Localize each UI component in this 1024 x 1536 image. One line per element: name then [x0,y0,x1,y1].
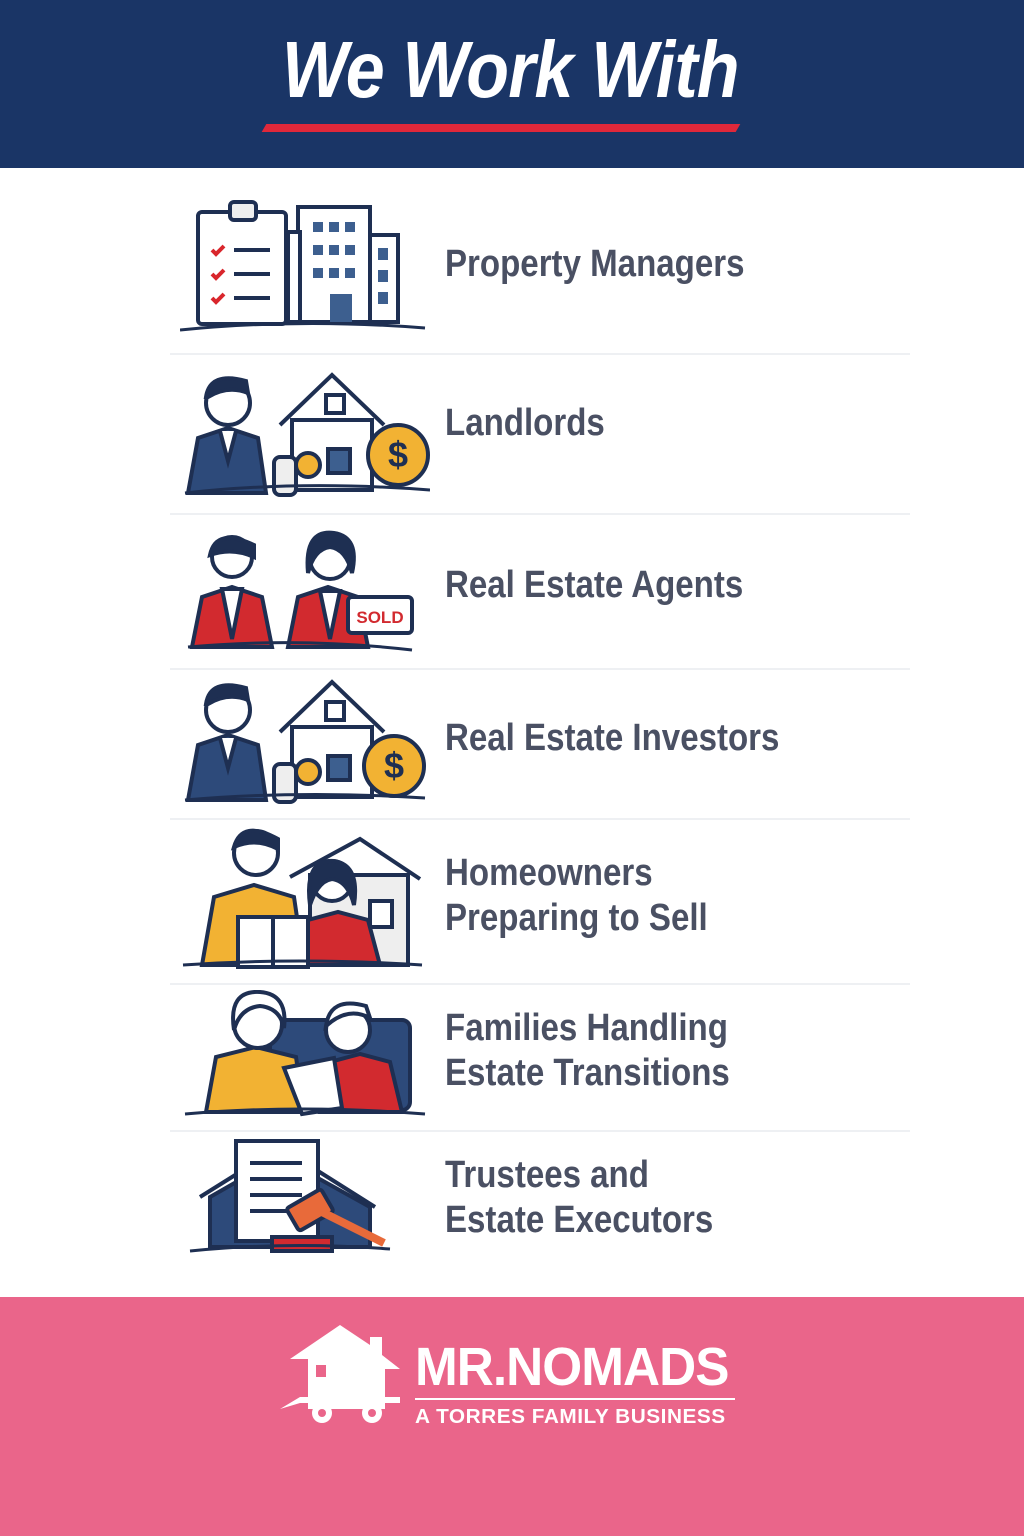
title underline [262,124,740,132]
icon: document, house and gavel [190,1139,390,1253]
icon: clipboard and buildings [180,200,426,332]
icon: elderly couple with document [184,990,426,1116]
label: Property Managers [445,243,744,285]
footer band [0,1297,1024,1536]
icon: house on wheels [280,1325,400,1423]
row: real estate agents [188,530,743,652]
row: homeowners [182,828,708,969]
tagline: A TORRES FAMILY BUSINESS [415,1406,726,1428]
label: Preparing to Sell [445,897,708,939]
brand name: MR.NOMADS [415,1337,728,1397]
label [445,1007,730,1094]
icon: landlord with house and coin: $ [388,434,408,475]
label [445,1154,713,1241]
label: Landlords [445,402,605,444]
label: Families Handling [445,1007,728,1049]
icon: two agents with sold sign: SOLD [356,608,404,627]
icon: two agents with sold sign [188,530,414,652]
icon: landlord with house and coin [184,372,430,497]
row: property managers [180,200,744,332]
icon: investor with house and coin: $ [384,745,404,786]
header band [0,0,1024,168]
row: trustees [190,1139,713,1253]
logo [280,1325,735,1428]
label: Real Estate Agents [445,564,743,606]
label: Real Estate Investors [445,717,779,759]
icon: couple with box and house [182,828,422,969]
label: Estate Executors [445,1199,713,1241]
label: Homeowners [445,852,653,894]
label: Estate Transitions [445,1052,730,1094]
title: We Work With [282,25,739,114]
label [445,852,708,939]
label: Trustees and [445,1154,649,1196]
row: families [184,990,730,1116]
row: landlords [184,372,605,497]
icon: investor with house and coin [184,679,426,804]
row: real estate investors [184,679,779,804]
